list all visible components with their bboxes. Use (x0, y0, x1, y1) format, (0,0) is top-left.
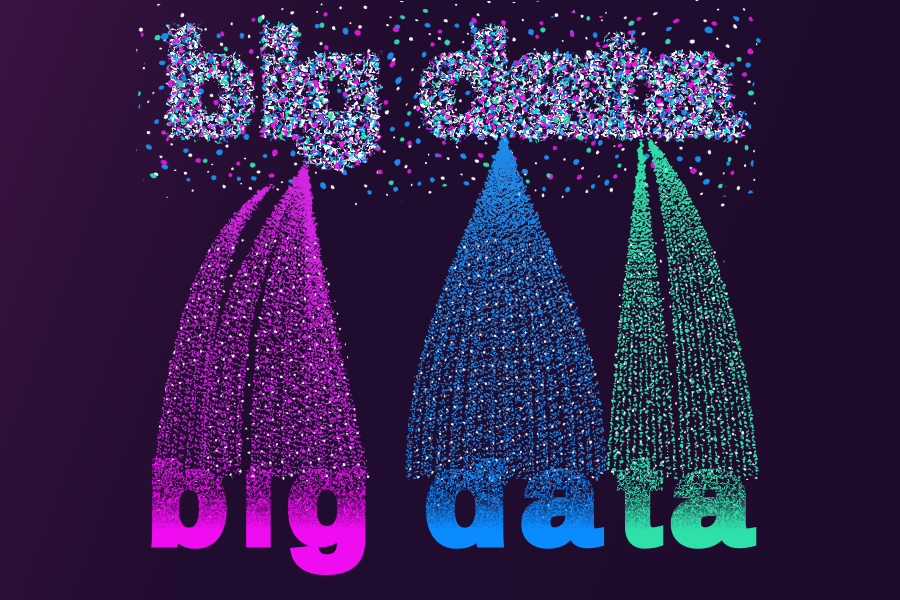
bottom word: big data (151, 458, 756, 575)
white sparkles in streams (140, 240, 760, 485)
title: big data particle cloud: t (591, 6, 646, 163)
title: big data particle cloud: g (293, 6, 383, 163)
title: big data particle cloud: d (420, 6, 510, 163)
particle scatter around title (140, 2, 760, 202)
bottom word: big data: i (242, 425, 275, 571)
title: big data particle cloud: i (259, 6, 301, 163)
bottom word: big data: b (148, 425, 228, 571)
bottom word: big data: t (620, 425, 660, 571)
bottom word: big data: d (425, 425, 508, 571)
title: big data particle cloud: a (645, 6, 736, 163)
stream: green particles (608, 138, 757, 482)
bottom word: big data: a (522, 425, 600, 571)
stream: magenta particles (155, 165, 368, 481)
stream: blue particles (407, 135, 605, 484)
bottom word: big data: a (672, 425, 752, 571)
title: big data particle cloud (164, 6, 736, 163)
title: big data particle cloud: a (505, 6, 594, 163)
letter sparkles (158, 458, 736, 528)
title: big data particle cloud: b (164, 6, 254, 163)
bottom word: big data: g (287, 425, 370, 571)
